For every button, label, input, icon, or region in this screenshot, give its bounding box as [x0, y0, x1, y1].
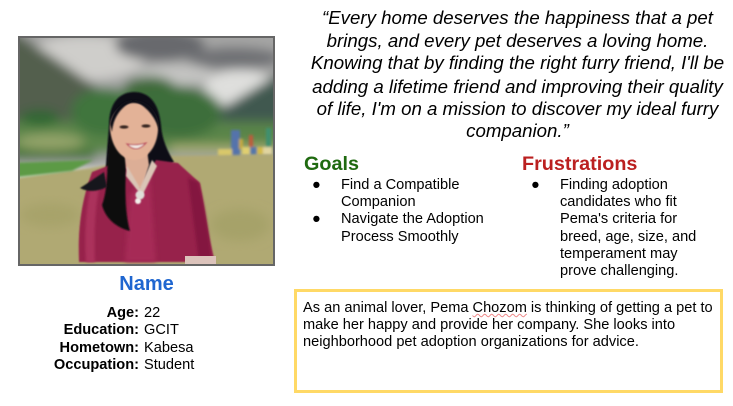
hair front [102, 130, 130, 231]
goals list: ● [312, 211, 321, 227]
demographic details: Education: [64, 322, 139, 338]
quote: Knowing that by finding the right furry friend, I'll be [311, 52, 724, 73]
goals list: Process Smoothly [341, 229, 459, 245]
demographic details: GCIT [144, 322, 179, 338]
frustrations list: temperament may [560, 246, 678, 262]
persona photo [18, 36, 275, 266]
demographic details: Occupation: [54, 357, 139, 373]
name heading: Name [119, 273, 174, 295]
frustrations heading: Frustrations [522, 153, 637, 175]
demographic details: Kabesa [144, 340, 194, 356]
scenario box [294, 289, 723, 393]
frustrations list [531, 177, 696, 279]
frustrations list: Pema's criteria for [560, 211, 677, 227]
demographic details: Student [144, 357, 194, 373]
demographic details: Age: [107, 305, 139, 321]
goals list: Companion [341, 194, 416, 210]
quote [311, 7, 724, 141]
scenario box: make her happy and provide her company. She looks into [303, 317, 675, 333]
demographic details: Hometown: [60, 340, 139, 356]
quote: companion.” [466, 120, 569, 141]
demographic details [54, 305, 194, 373]
quote: adding a lifetime friend and improving their quality [312, 76, 723, 97]
robe [79, 158, 215, 262]
frustrations list: ● [531, 177, 540, 193]
frustrations list: breed, age, size, and [560, 229, 696, 245]
goals list: Navigate the Adoption [341, 211, 484, 227]
quote: brings, and every pet deserves a loving home. [327, 30, 708, 51]
demographic details: 22 [144, 305, 160, 321]
goals heading: Goals [304, 153, 359, 175]
scenario box: neighborhood pet adoption organizations for advice. [303, 334, 639, 350]
scenario box: As an animal lover, Pema Chozom is thinking of getting a pet to [303, 300, 713, 316]
quote: “Every home deserves the happiness that a pet [322, 7, 713, 28]
frustrations list: prove challenging. [560, 263, 678, 279]
hair back [104, 91, 175, 178]
goals list: Find a Compatible [341, 177, 459, 193]
frustrations list: Finding adoption [560, 177, 668, 193]
goals list: ● [312, 177, 321, 193]
face [110, 103, 158, 160]
quote: of life, I'm on a mission to discover my ideal furry [317, 98, 718, 119]
goals list [312, 177, 484, 245]
frustrations list: candidates who fit [560, 194, 677, 210]
neck and collar [124, 150, 149, 188]
